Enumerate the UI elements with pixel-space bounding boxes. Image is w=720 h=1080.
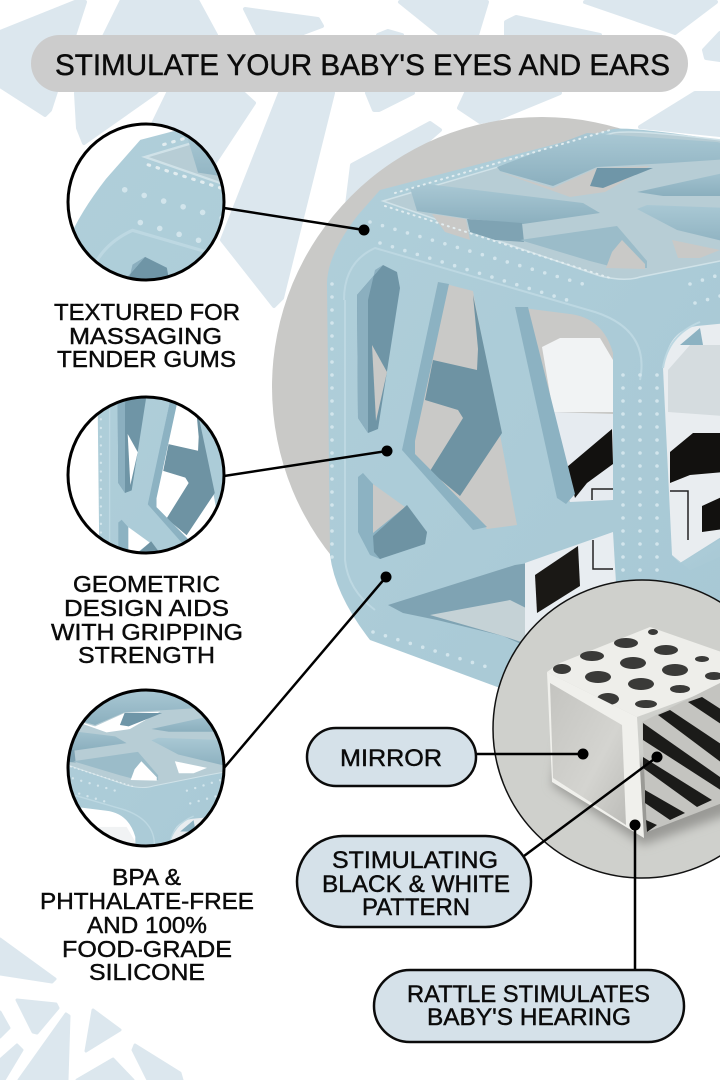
callout 1 line xyxy=(224,208,370,236)
text: textured for massaging xyxy=(54,299,240,372)
callout line: mirror xyxy=(477,748,588,760)
inset circle: food-grade silicone xyxy=(66,688,226,848)
top openings xyxy=(410,133,720,269)
label pill: pattern: STIMULATING xyxy=(332,847,498,874)
background pattern: top xyxy=(0,0,720,306)
bevel highlights xyxy=(344,248,700,610)
inset circle: mirror and pattern block xyxy=(493,580,720,878)
label pill: mirror xyxy=(307,728,476,786)
text: geometric design: DESIGN AIDS xyxy=(64,595,229,621)
label pill: mirror: MIRROR xyxy=(340,745,442,772)
callout line: rattle xyxy=(630,820,640,971)
background pattern: bottom left xyxy=(0,939,182,1080)
product photo: silicone rattle cube xyxy=(327,129,720,740)
text: BPA free: PHTHALATE-FREE xyxy=(40,888,254,914)
text: textured for massaging: TEXTURED FOR xyxy=(54,299,240,325)
callout 2 line xyxy=(224,446,392,476)
lower left opening xyxy=(358,473,427,559)
mirror face xyxy=(550,683,626,825)
text: textured for massaging: MASSAGING xyxy=(69,323,222,349)
label pill: rattle: RATTLE STIMULATES xyxy=(407,981,650,1008)
label pill: rattle xyxy=(374,970,684,1042)
cube body xyxy=(327,129,720,740)
label pill: pattern: BLACK & WHITE xyxy=(322,871,510,898)
stripe face xyxy=(642,678,720,832)
text: geometric design: WITH GRIPPING xyxy=(51,619,243,645)
opening with rattle behind xyxy=(515,307,613,504)
callout line: pattern xyxy=(524,752,662,856)
text: geometric design: GEOMETRIC xyxy=(73,571,220,597)
upper left opening xyxy=(357,265,400,433)
textured dots xyxy=(332,222,720,670)
callout 3 line xyxy=(224,572,392,768)
title banner: STIMULATE YOUR BABY'S EYES AND EARS xyxy=(55,49,670,82)
label pill: pattern: PATTERN xyxy=(362,894,470,921)
inset circle: textured corner xyxy=(66,122,226,282)
block left frame xyxy=(547,672,644,838)
title banner xyxy=(31,35,688,92)
rattle below the bar xyxy=(525,532,617,640)
text: BPA free xyxy=(40,864,254,985)
opening on the right xyxy=(663,318,720,570)
text: textured for massaging: TENDER GUMS xyxy=(57,346,236,372)
bottom opening xyxy=(388,562,535,650)
text: BPA free: AND 100% xyxy=(87,912,207,938)
text: geometric design xyxy=(51,571,243,668)
grey circle behind the rattle xyxy=(272,117,720,657)
block top face xyxy=(547,627,720,717)
top plate xyxy=(383,132,720,279)
inset circle: geometric design xyxy=(66,396,226,554)
text: BPA free: BPA & xyxy=(112,864,181,890)
text: BPA free: SILICONE xyxy=(89,959,205,985)
text: BPA free: FOOD-GRADE xyxy=(62,936,232,962)
text: geometric design: STRENGTH xyxy=(78,642,215,668)
label pill: rattle: BABY'S HEARING xyxy=(427,1004,631,1031)
polka dots xyxy=(553,629,720,708)
label pill: pattern xyxy=(297,836,531,927)
centre opening xyxy=(402,282,517,530)
